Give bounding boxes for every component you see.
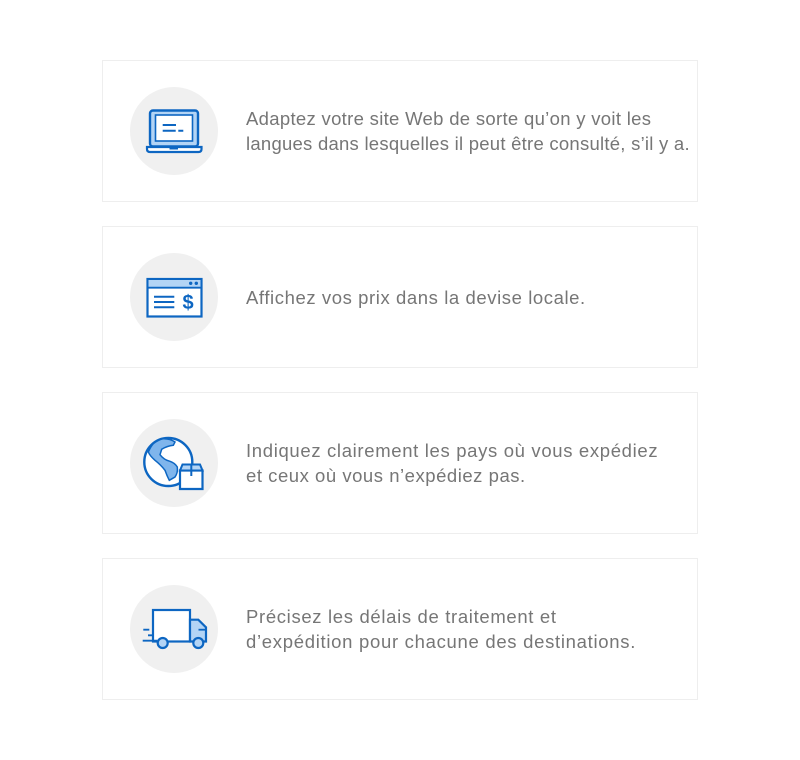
text: shipping countries — [246, 440, 658, 486]
panel: website languages — [102, 60, 698, 202]
text: website languages: langues dans lesquelles il peut être consulté, s’il y a. — [246, 133, 690, 154]
icon: laptop — [130, 87, 218, 175]
panel: shipping countries — [102, 392, 698, 534]
icon: price window — [130, 253, 218, 341]
text: shipping times: d’expédition pour chacune des destinations. — [246, 631, 636, 652]
panel: local currency — [102, 226, 698, 368]
text: shipping times — [246, 606, 636, 652]
text: website languages — [246, 108, 690, 154]
text: shipping countries: Indiquez clairement les pays où vous expédiez — [246, 440, 658, 461]
icon: delivery truck — [130, 585, 218, 673]
panel: shipping times — [102, 558, 698, 700]
icon: price window: $ — [182, 292, 194, 314]
icon: globe and parcel — [130, 419, 218, 507]
text: shipping countries: et ceux où vous n’expédiez pas. — [246, 465, 526, 486]
text: shipping times: Précisez les délais de traitement et — [246, 606, 557, 627]
text: local currency: Affichez vos prix dans la devise locale. — [246, 287, 586, 308]
text: website languages: Adaptez votre site Web de sorte qu’on y voit les — [246, 108, 651, 129]
